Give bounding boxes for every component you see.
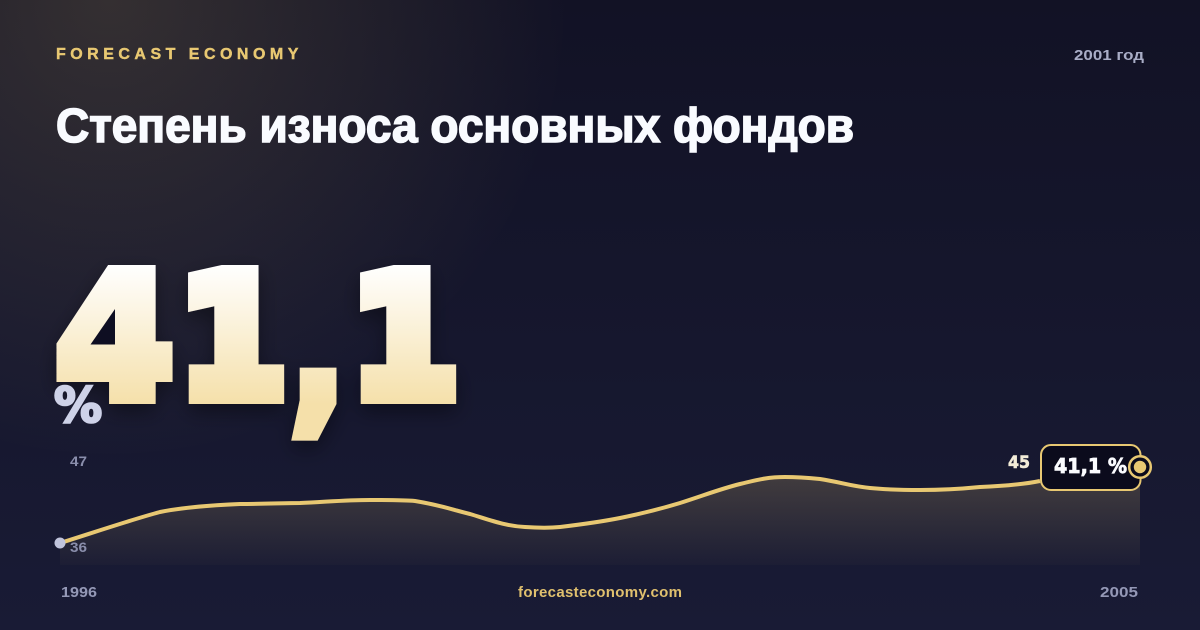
percent sign: % [54,378,102,434]
big value [58,240,458,448]
big value: 4 [58,240,171,434]
period label: 2001 год [1074,47,1145,64]
axis min label: 36 [70,539,87,555]
end year: 2005 [1100,584,1138,601]
start year: 1996 [61,584,97,601]
title: Степень износа основных фондов [56,100,854,153]
big value: , [294,255,343,448]
start point [54,538,66,548]
previous value label: 45 [1008,453,1030,473]
line [60,477,1040,543]
value badge [1041,445,1140,490]
value badge: 41,1 % [1054,454,1127,478]
source: forecasteconomy.com [518,584,682,601]
end marker [1129,456,1151,478]
big value: 1 [351,241,458,434]
area fill [60,467,1140,565]
chart [54,445,1151,565]
brand label: FORECAST ECONOMY [56,46,303,63]
big value: 1 [179,241,286,434]
axis max label: 47 [70,453,87,469]
